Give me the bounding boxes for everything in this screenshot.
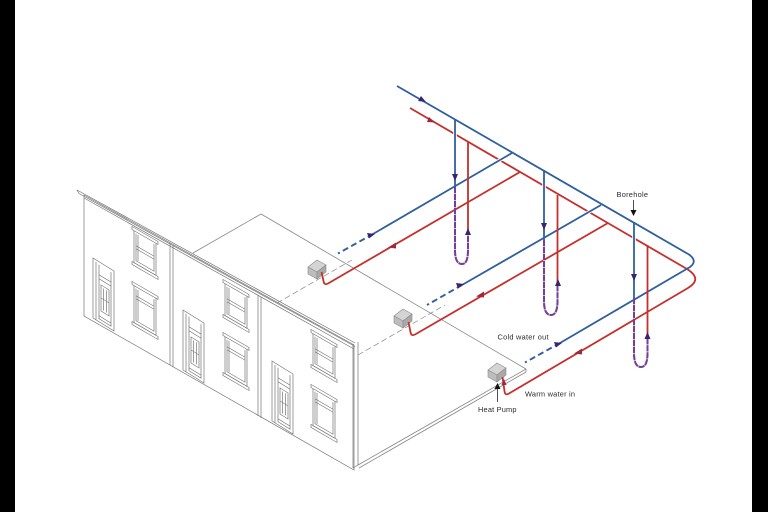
window: house 1 upper [132,226,158,280]
window: house 3 upper [311,329,337,382]
blue main pipe with branches [338,86,694,362]
terraced house facade [77,190,358,470]
window: house 3 lower [311,384,337,442]
label: Warm water in: Warm water in [525,390,575,398]
heat pump 3 [488,363,506,382]
arrow: Heat Pump pointer [494,383,500,402]
red main pipe with branches [322,108,695,394]
window: house 2 upper [223,279,249,332]
right black border [752,0,768,512]
borehole loop 3 [634,222,648,367]
window: house 2 lower [223,332,249,390]
dashed service lines [277,260,445,355]
window: house 1 lower [132,281,158,340]
borehole loop 1 [455,120,468,264]
door: house 2 [183,310,204,383]
flow arrowheads [367,96,650,385]
heat pump 2 [394,309,412,328]
eaves [77,190,355,349]
arrow: Borehole pointer [630,200,636,216]
roof plane outline [193,214,526,468]
left black border [0,0,15,512]
door: house 1 [93,258,114,331]
borehole loop 2 [544,170,558,315]
label: Borehole: Borehole [616,190,648,199]
front wall [84,195,354,470]
party walls and corner [170,243,358,468]
heat pump 1 [308,260,326,279]
label: Heat Pump: Heat Pump [478,405,516,414]
label: Cold water out: Cold water out [498,332,548,342]
door: house 3 [272,361,293,434]
